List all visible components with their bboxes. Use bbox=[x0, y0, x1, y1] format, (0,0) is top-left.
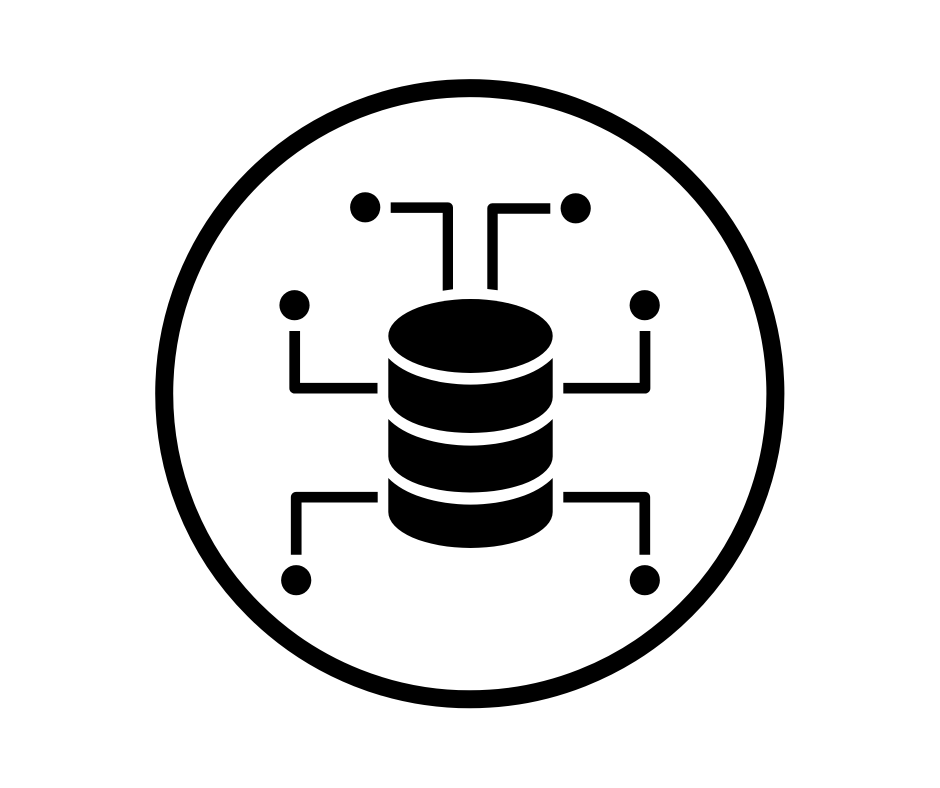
node middle left bbox=[279, 290, 310, 320]
top disk bbox=[388, 299, 553, 373]
top left connector bbox=[391, 202, 453, 291]
bottom right connector bbox=[563, 497, 645, 555]
middle left connector bbox=[295, 331, 378, 388]
bottom segment bbox=[388, 478, 553, 548]
node top left bbox=[350, 192, 380, 222]
connector nodes bbox=[279, 192, 660, 595]
top right connector bbox=[487, 203, 550, 290]
node bottom left bbox=[281, 565, 311, 595]
connector lines bbox=[295, 202, 645, 555]
node bottom right bbox=[630, 565, 660, 595]
database cylinder bbox=[388, 299, 553, 548]
middle right connector bbox=[563, 331, 645, 388]
bottom left connector bbox=[296, 497, 378, 555]
middle segment bbox=[388, 419, 553, 492]
node middle right bbox=[630, 290, 660, 320]
upper segment bbox=[388, 358, 553, 433]
outer circle bbox=[164, 88, 775, 699]
node top right bbox=[561, 193, 591, 223]
